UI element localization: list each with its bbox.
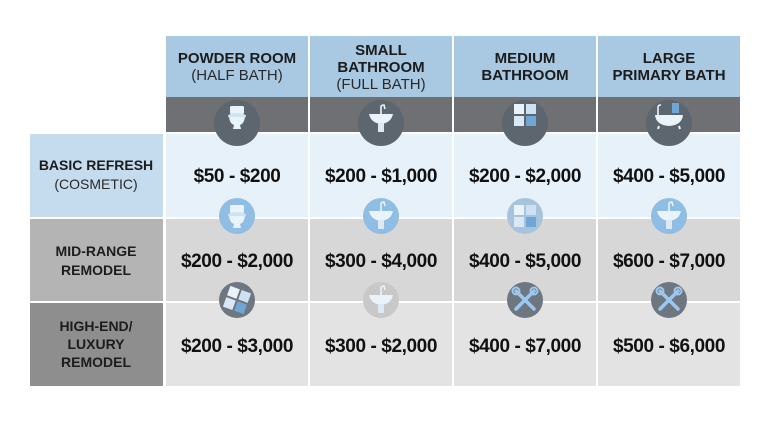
row label: mid-range [30, 219, 163, 301]
header icon band [166, 97, 740, 132]
prices: $500 - $6,000 [613, 336, 725, 357]
row label: basic refresh: (COSMETIC) [54, 176, 138, 192]
prices: $400 - $7,000 [469, 336, 581, 357]
row label: high-end [30, 303, 163, 386]
prices: $300 - $4,000 [325, 251, 437, 272]
header: small bathroom [310, 36, 452, 97]
row label: high-end: LUXURY [67, 336, 125, 352]
header: medium bathroom [454, 36, 596, 97]
row 3 cells [166, 303, 740, 386]
row 1 cells [166, 134, 740, 217]
header: small bathroom: (FULL BATH) [336, 76, 426, 93]
header: powder room: POWDER ROOM [178, 50, 296, 67]
prices: $400 - $5,000 [469, 251, 581, 272]
prices: $400 - $5,000 [613, 166, 725, 187]
row 1/2 icons [219, 198, 687, 234]
header: large primary bath: LARGE [643, 50, 695, 67]
header: large primary bath [598, 36, 740, 97]
prices: $50 - $200 [194, 166, 280, 187]
prices: $600 - $7,000 [613, 251, 725, 272]
prices: $200 - $2,000 [469, 166, 581, 187]
row label: basic refresh: BASIC REFRESH [39, 157, 153, 173]
prices: $200 - $3,000 [181, 336, 293, 357]
header: powder room [166, 36, 308, 97]
row label: basic refresh [30, 134, 163, 217]
header: small bathroom: SMALL [355, 42, 407, 59]
header: medium bathroom: BATHROOM [481, 67, 569, 84]
row label: high-end: REMODEL [61, 354, 131, 370]
header: large primary bath: PRIMARY BATH [612, 67, 726, 84]
row label: high-end: HIGH-END/ [59, 318, 133, 334]
row 2/3 icons [219, 282, 687, 318]
header: small bathroom: BATHROOM [337, 59, 425, 76]
row label: mid-range: REMODEL [61, 262, 131, 278]
row label: mid-range: MID-RANGE [56, 243, 136, 259]
prices [181, 166, 725, 357]
header: medium bathroom: MEDIUM [495, 50, 555, 67]
header icons [214, 100, 692, 146]
prices: $200 - $1,000 [325, 166, 437, 187]
prices: $300 - $2,000 [325, 336, 437, 357]
prices: $200 - $2,000 [181, 251, 293, 272]
header: powder room: (HALF BATH) [191, 67, 283, 84]
row 2 cells [166, 219, 740, 301]
